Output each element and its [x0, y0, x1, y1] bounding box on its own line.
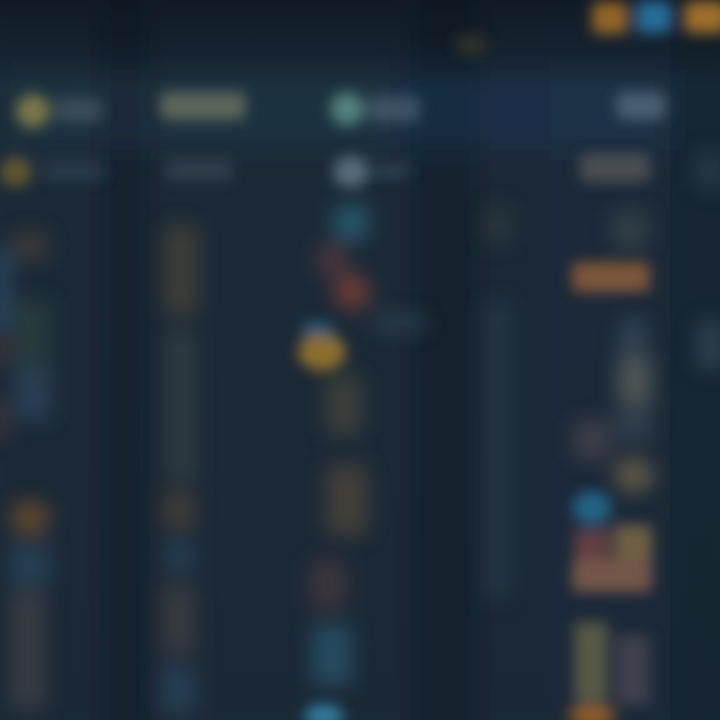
amber highlight and blue marker [298, 322, 346, 720]
second row [0, 154, 650, 188]
top right tabs [456, 1, 720, 54]
left column marks [0, 232, 50, 710]
third column marks [310, 205, 426, 685]
right column marks [574, 150, 720, 493]
right column bright blocks [568, 262, 652, 720]
faint middle-right column [482, 205, 512, 600]
second column marks [160, 225, 198, 715]
header row [16, 92, 666, 128]
